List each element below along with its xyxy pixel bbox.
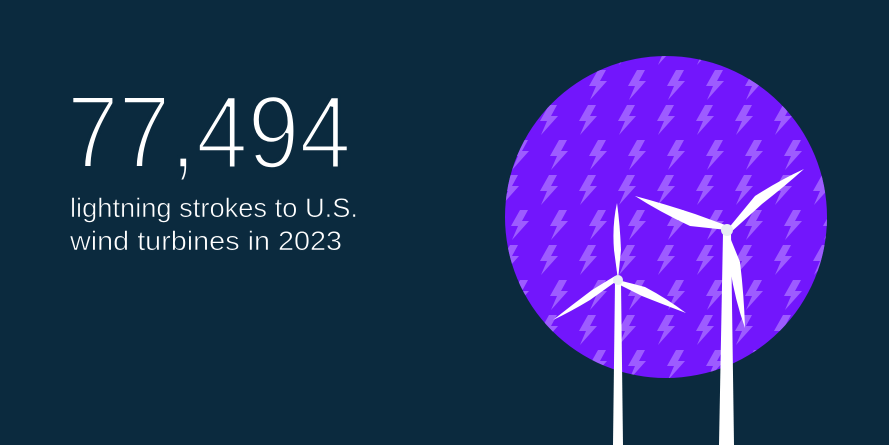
purple circle with lightning pattern bbox=[505, 56, 827, 378]
subtitle: lightning strokes to U.S. bbox=[70, 193, 358, 223]
big turbine bbox=[635, 169, 804, 445]
small turbine bbox=[553, 203, 686, 445]
big number: 77,494 bbox=[67, 75, 351, 191]
subtitle bbox=[69, 193, 358, 256]
subtitle: wind turbines in 2023 bbox=[69, 226, 342, 256]
